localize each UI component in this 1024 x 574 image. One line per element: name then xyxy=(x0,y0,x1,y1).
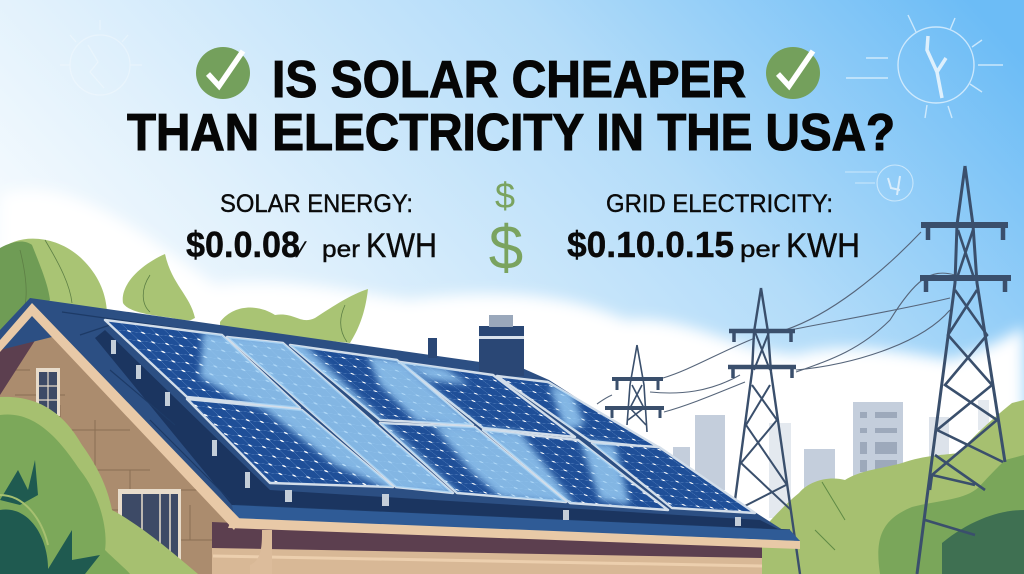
chimney xyxy=(428,315,524,376)
icon: small sun with lightning xyxy=(845,165,913,201)
grid electricity price xyxy=(567,190,860,265)
bushes lower right xyxy=(762,400,1024,574)
solar panels xyxy=(105,320,755,526)
icon: check badge left xyxy=(196,47,250,99)
panel group left xyxy=(105,320,453,493)
pylon: far small xyxy=(605,345,664,432)
icon: dollar signs xyxy=(489,175,523,283)
solar energy price: $0.0.08 xyxy=(186,224,300,265)
house gable wall xyxy=(0,312,235,574)
house xyxy=(0,312,762,574)
heading: IS SOLAR CHEAPER xyxy=(272,51,746,109)
solar energy price: per xyxy=(322,236,360,262)
power line wires xyxy=(597,232,955,412)
icon: dollar signs: $ xyxy=(495,175,515,216)
roof xyxy=(0,298,800,541)
grid electricity price: KWH xyxy=(786,227,860,265)
heading: THAN ELECTRICITY IN THE USA? xyxy=(127,104,895,162)
lower window xyxy=(118,489,181,569)
solar energy price xyxy=(186,190,437,265)
panel mounts xyxy=(111,340,741,526)
panel group right xyxy=(290,345,755,513)
white clouds xyxy=(0,190,1024,574)
heading xyxy=(127,51,895,162)
upper window xyxy=(36,368,60,416)
icon: dollar signs: $ xyxy=(489,214,523,283)
icon: faint sun top left xyxy=(60,20,142,95)
solar energy price: ⁄ xyxy=(295,237,307,262)
lower wall and soffit xyxy=(212,530,762,574)
grid electricity price: $0.10.0.15 xyxy=(567,224,734,265)
city skyline xyxy=(673,400,989,518)
grid electricity price: per xyxy=(740,236,780,262)
pylon: large foreground xyxy=(917,166,1011,574)
leaves behind the house xyxy=(0,239,368,345)
rake and fascia trim xyxy=(0,303,800,574)
icon: check badge right xyxy=(766,47,820,99)
solar energy price: SOLAR ENERGY: xyxy=(220,190,413,218)
icon: sun with lightning top right xyxy=(846,15,1003,118)
grid electricity price: GRID ELECTRICITY: xyxy=(606,190,833,218)
sunlight reflections xyxy=(200,332,630,505)
bush lower left xyxy=(0,397,198,574)
solar energy price: KWH xyxy=(366,227,437,265)
pylon: middle xyxy=(728,288,800,574)
